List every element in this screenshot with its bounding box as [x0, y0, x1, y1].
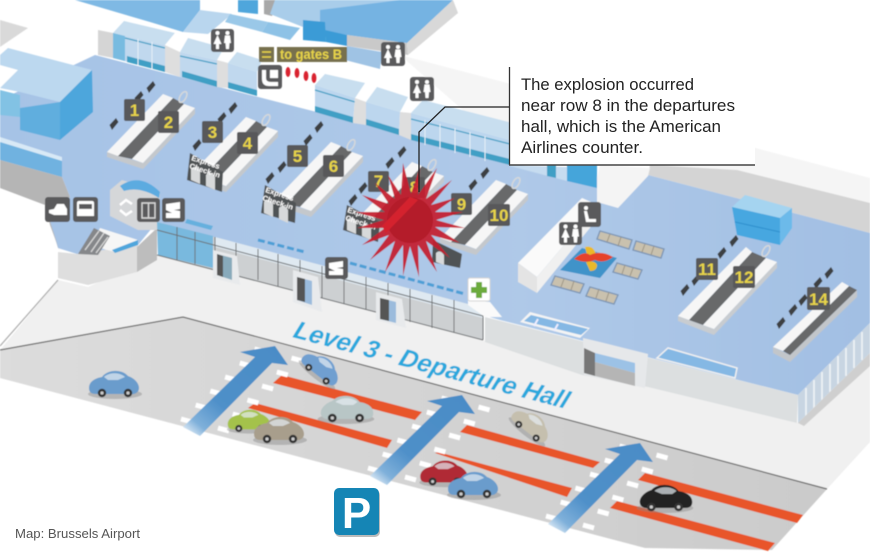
number signs: 2: [164, 113, 173, 132]
road edge lines: [0, 317, 827, 489]
kerb walkway: [0, 255, 870, 489]
walkway left edge: [0, 280, 58, 346]
car: green: [227, 410, 273, 434]
counter rows 1 and 2: [107, 81, 195, 169]
callout leader line: [419, 107, 509, 192]
icon: baggage: [258, 65, 282, 89]
car: black: [637, 485, 693, 513]
icon: restroom east: [381, 42, 405, 66]
number signs: 6: [329, 157, 338, 176]
number signs: 12: [735, 268, 753, 287]
front facade: [157, 219, 483, 340]
waiting area seats: [551, 231, 664, 304]
gates sign: to gates B: [280, 46, 342, 62]
counter rows 7 and 8: Express: [346, 205, 377, 223]
car: blue front: [447, 472, 501, 500]
road: [0, 317, 827, 550]
icon: restroom near callout: [410, 77, 434, 101]
counter rows 7 and 8: Check-in: [344, 213, 378, 232]
counter rows 11 and 12: [678, 235, 777, 335]
callout: Airlines counter.: [521, 138, 643, 157]
number signs: 1: [130, 101, 139, 120]
icon: restroom: [211, 29, 234, 52]
counter rows 3 and 4: Check-in: [188, 161, 222, 180]
counter rows 5 and 6: [261, 121, 363, 223]
lower left building: [58, 228, 157, 285]
number signs: 4: [243, 134, 253, 153]
red footprints: [286, 67, 316, 83]
counter rows 5 and 6: Express: [264, 185, 295, 203]
number signs: 3: [208, 123, 217, 142]
icon: seated person: [578, 202, 601, 227]
number signs: 7: [374, 172, 383, 191]
icon: restroom waiting area: [559, 222, 582, 245]
elevator block: [110, 180, 160, 230]
counter rows 5 and 6: Check-in: [261, 193, 295, 212]
icon: check-in: [162, 198, 185, 222]
callout: hall, which is the American: [521, 117, 721, 136]
counter row 14: [773, 267, 857, 362]
counter rows 7 and 8: [343, 146, 444, 242]
cars: [88, 345, 693, 513]
number signs: 9: [457, 195, 466, 214]
crossing arrow 1: [181, 346, 302, 436]
floor heading: Level 3 - Departure Hall: [290, 316, 575, 415]
icon: taxi: [45, 197, 70, 222]
number signs: 14: [809, 290, 828, 309]
explosion marker: [355, 163, 465, 277]
service icons: [45, 29, 601, 279]
icon: elevator: [137, 198, 160, 222]
entrance doors: [213, 250, 406, 328]
car: silver: [318, 396, 374, 424]
lower right glass: [798, 323, 870, 426]
parking lane stripes: [248, 375, 803, 551]
car: brown: [253, 417, 307, 445]
map credit: Map: Brussels Airport: [15, 527, 141, 541]
departure hall floor: [0, 55, 870, 395]
callout: near row 8 in the departures: [521, 96, 735, 115]
parking sign: [334, 488, 380, 538]
upper terminal structures: [75, 0, 458, 69]
callout: The explosion occurred: [521, 75, 694, 94]
car: red: [419, 460, 471, 487]
number signs: 11: [698, 260, 716, 279]
icon: green cross: [468, 278, 490, 301]
right blue kiosk: [732, 195, 792, 245]
icon: bus: [73, 197, 98, 222]
row of shops along the back wall: [98, 21, 597, 188]
number signs: [124, 99, 830, 310]
white pillars: [518, 165, 650, 293]
counter rows 9 and 10: [432, 167, 528, 268]
car: blue near kerb: [296, 345, 347, 392]
east front wall: [468, 300, 798, 423]
counter rows 3 and 4: Express: [190, 153, 221, 171]
car: blue far left: [88, 371, 142, 399]
left curved wall: [0, 160, 70, 252]
number signs: 5: [293, 147, 302, 166]
number signs: 10: [490, 206, 508, 225]
crossing arrow 3: [546, 443, 668, 533]
background wall bands: [0, 20, 870, 233]
number signs: 8: [410, 178, 419, 197]
waiting area carpet: [560, 247, 617, 278]
counter rows 3 and 4: [187, 102, 278, 192]
icon: check-in door: [325, 257, 348, 279]
parking sign: P: [342, 489, 371, 538]
left glass rooms: [0, 48, 93, 177]
callout: [509, 67, 755, 165]
car: beige: [506, 402, 557, 449]
crossing arrow 2: [368, 395, 490, 485]
